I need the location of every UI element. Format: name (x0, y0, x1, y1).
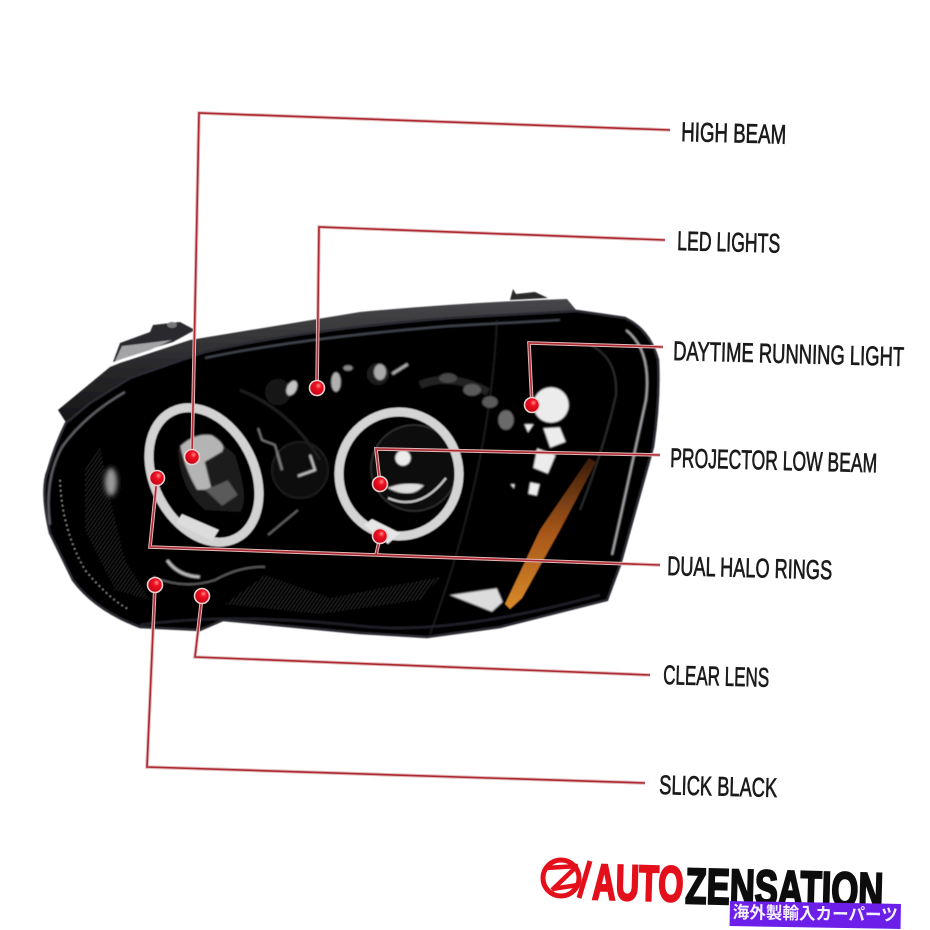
logo: autozensation (543, 854, 884, 919)
amber side marker (505, 458, 596, 609)
swoosh trim (153, 567, 265, 584)
label: slick black: SLICK BLACK (659, 770, 778, 803)
logo word auto: AUTO (592, 854, 684, 912)
lens body (44, 311, 658, 637)
headlight assembly (44, 289, 658, 637)
label: led lights: LED LIGHTS (677, 226, 781, 259)
label: high beam: HIGH BEAM (681, 117, 787, 150)
label: clear lens: CLEAR LENS (663, 660, 770, 693)
lens rim highlights (48, 320, 647, 634)
mounting bracket left (113, 322, 195, 362)
lower white reflection (449, 588, 503, 612)
top gasket (58, 299, 577, 424)
left halo ring projector (127, 389, 281, 561)
left fins (85, 445, 150, 600)
label: dual halo rings: DUAL HALO RINGS (667, 551, 833, 585)
callout dots (148, 380, 540, 604)
mid reflector (240, 390, 328, 535)
LED row (265, 363, 514, 430)
watermark banner: 海外製輸入カーパーツ (733, 903, 898, 925)
right halo ring projector (339, 412, 459, 544)
right reflector and side bulb (510, 387, 569, 496)
carbon band (225, 575, 440, 614)
callout lines (147, 113, 670, 783)
icon: logo wheel (543, 860, 590, 898)
mounting tab top right (510, 289, 548, 300)
